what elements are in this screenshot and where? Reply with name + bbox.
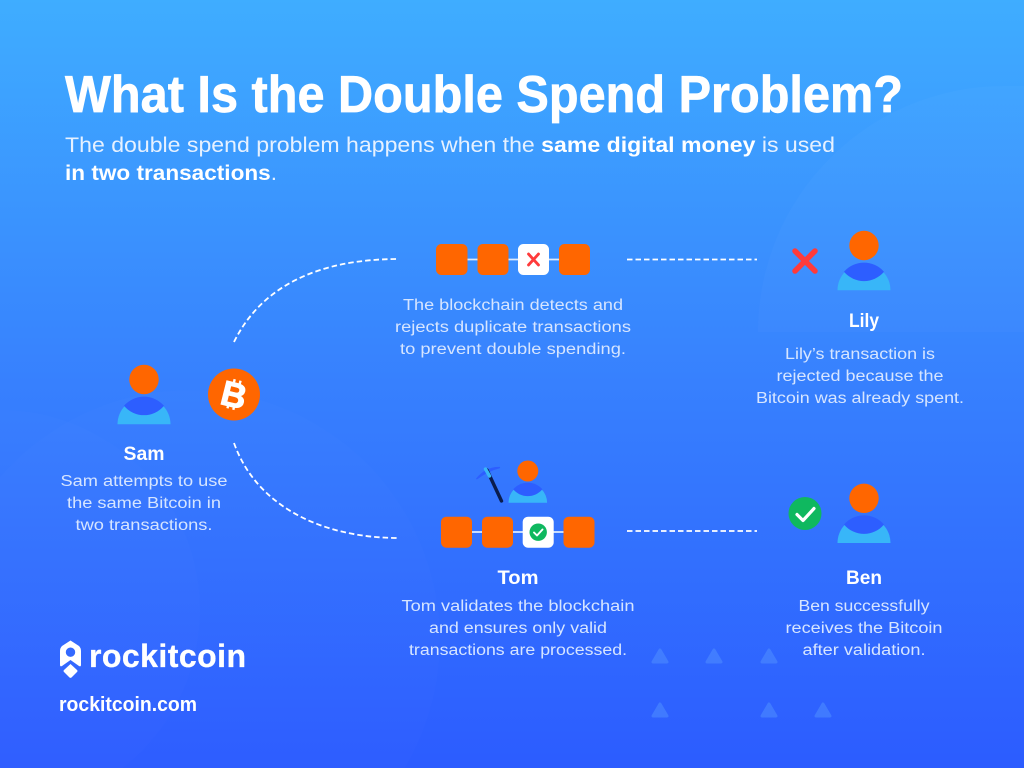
icon: blockchain with validated block xyxy=(441,517,594,548)
panel: rejected blockchain xyxy=(395,244,631,358)
description: Lily xyxy=(756,346,964,407)
panel: Lily xyxy=(756,231,964,407)
icon: Tom person xyxy=(508,460,547,503)
subtitle xyxy=(65,133,835,185)
icon: bitcoin coin: B xyxy=(217,373,251,417)
logo: rockitcoin xyxy=(60,638,246,678)
arrow: rejected blockchain to Lily xyxy=(627,258,757,260)
description: Lily: rejected because the xyxy=(776,368,944,385)
arrow: Sam to validated blockchain xyxy=(234,443,399,538)
icon: pickaxe xyxy=(476,467,502,501)
website url: rockitcoin.com xyxy=(59,694,197,716)
description: Tom: and ensures only valid xyxy=(429,620,607,637)
description: blockchain rejection xyxy=(395,297,631,358)
description: blockchain rejection: to prevent double spending. xyxy=(400,341,626,358)
name: Ben: Ben xyxy=(846,567,882,589)
arrow: Sam to rejected blockchain xyxy=(234,259,399,342)
icon: Sam person xyxy=(118,365,170,424)
panel: Ben xyxy=(786,484,942,659)
description: Sam: Sam attempts to use xyxy=(60,473,228,490)
description: Tom xyxy=(402,598,634,659)
description: Lily: Bitcoin was already spent. xyxy=(756,390,964,407)
icon: red cross xyxy=(795,251,815,271)
title: What Is the Double Spend Problem? xyxy=(65,66,903,124)
description: Sam: the same Bitcoin in xyxy=(67,495,221,512)
icon: bitcoin coin xyxy=(208,368,260,420)
subtitle: in two transactions . xyxy=(65,161,277,185)
description: blockchain rejection: The blockchain detects and xyxy=(403,297,623,314)
description: Ben: after validation. xyxy=(802,642,926,659)
name: Tom: Tom xyxy=(498,567,538,589)
description: Ben: receives the Bitcoin xyxy=(786,620,942,637)
panel: Sam xyxy=(60,365,260,534)
wordmark: rockitcoin xyxy=(89,638,246,674)
icon: Lily person xyxy=(838,231,890,290)
arrow: validated blockchain to Ben xyxy=(627,530,757,532)
panel: Tom xyxy=(402,460,634,659)
description: Lily: Lily’s transaction is xyxy=(785,346,935,363)
icon: green check xyxy=(788,497,822,530)
icon: Ben person xyxy=(838,484,890,543)
description: Ben: Ben successfully xyxy=(798,598,930,615)
icon: rocket xyxy=(60,640,81,678)
icon: blockchain with rejected block xyxy=(436,244,590,275)
description: Tom: Tom validates the blockchain xyxy=(402,598,634,615)
decorative triangles xyxy=(653,650,830,716)
description: blockchain rejection: rejects duplicate transactions xyxy=(395,319,631,336)
description: Sam xyxy=(60,473,228,534)
name: Sam: Sam xyxy=(124,443,164,465)
description: Ben xyxy=(786,598,942,659)
description: Tom: transactions are processed. xyxy=(409,642,627,659)
name: Lily: Lily xyxy=(849,310,879,332)
description: Sam: two transactions. xyxy=(76,517,212,534)
subtitle: The double spend problem happens when the same digital money is used xyxy=(65,133,835,157)
